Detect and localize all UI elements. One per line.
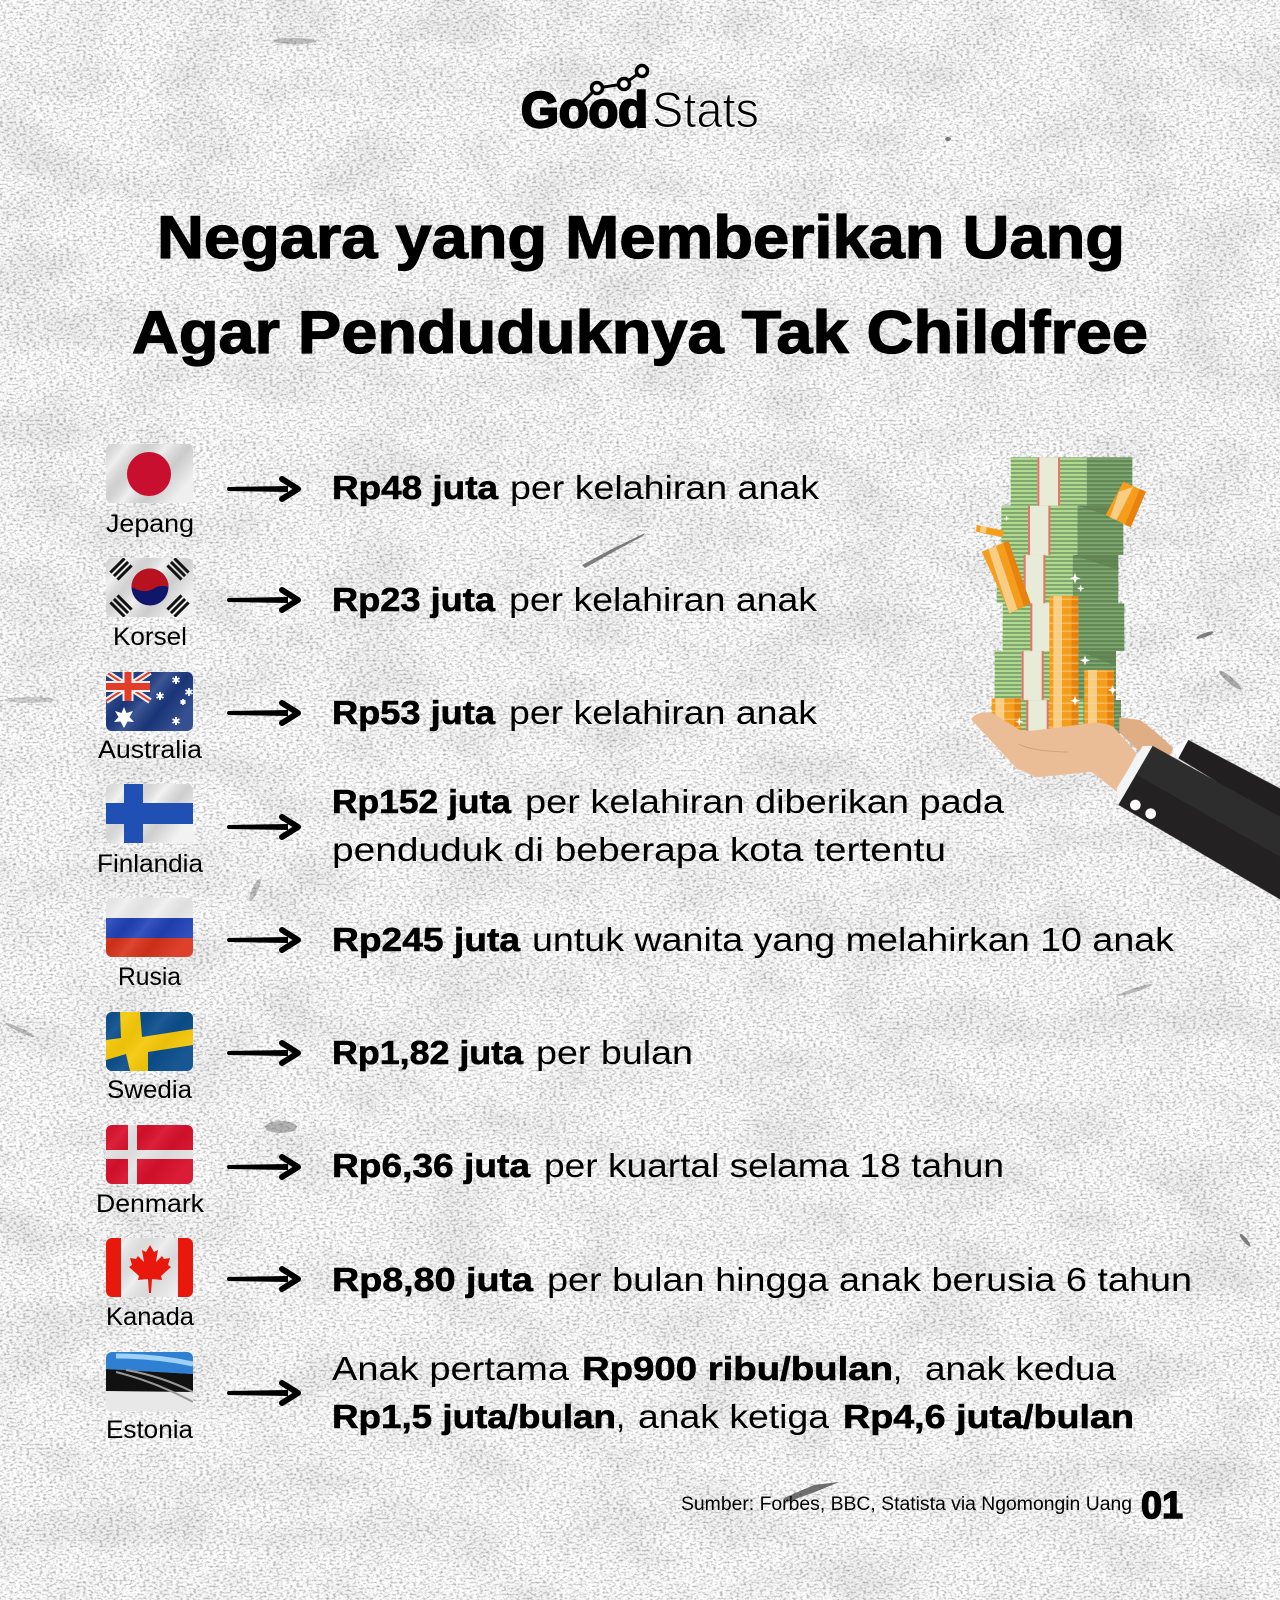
flag: Denmark: [106, 1125, 193, 1184]
row: Estonia: [106, 1350, 1134, 1444]
text: Jepang: [332, 469, 820, 506]
arrow: [227, 590, 298, 610]
page number: 01: [1141, 1485, 1183, 1527]
text: Jepang: per kelahiran anak: [510, 469, 820, 506]
row: Denmark: [96, 1125, 1004, 1218]
arrow: [227, 479, 298, 499]
icon: rising chart line: [581, 66, 648, 104]
text: Australia: Rp53 juta: [332, 694, 496, 731]
arrow: [227, 1043, 298, 1063]
text: Kanada: per bulan hingga anak berusia 6 tahun: [547, 1261, 1192, 1298]
source note: Sumber: Forbes, BBC, Statista via Ngomongin Uang: [681, 1494, 1132, 1515]
text: Estonia: Rp1,5 juta/bulan: [332, 1398, 616, 1435]
flag: Estonia: [106, 1352, 193, 1411]
text: Rusia: untuk wanita yang melahirkan 10 anak: [532, 921, 1175, 958]
text: Swedia: per bulan: [536, 1034, 693, 1071]
label: Rusia: Rusia: [118, 963, 181, 991]
arrow: [227, 1383, 298, 1403]
flag: Finlandia: [106, 784, 193, 843]
text: Korsel: Rp23 juta: [332, 581, 496, 618]
text: Finlandia: Rp152 juta: [332, 783, 512, 820]
label: Jepang: Jepang: [106, 510, 194, 538]
text: Finlandia: per kelahiran diberikan pada: [525, 783, 1005, 820]
text: Estonia: ,: [616, 1398, 625, 1435]
text: Estonia: ,: [893, 1350, 902, 1387]
text: Kanada: [332, 1261, 1192, 1298]
flag: Kanada: [106, 1238, 193, 1297]
label: Estonia: Estonia: [106, 1416, 193, 1444]
coin stacks: [976, 482, 1146, 735]
text: Korsel: [332, 581, 818, 618]
text: Denmark: per kuartal selama 18 tahun: [544, 1147, 1004, 1184]
sparkles: [1004, 515, 1118, 726]
row: Rusia: [106, 898, 1175, 991]
label: Swedia: Swedia: [107, 1076, 192, 1104]
text: Rusia: [332, 921, 1175, 958]
text: Kanada: Rp8,80 juta: [332, 1261, 534, 1298]
text: Estonia: Rp4,6 juta/bulan: [843, 1398, 1134, 1435]
label: Korsel: Korsel: [113, 623, 187, 651]
row: Kanada: [106, 1238, 1192, 1331]
text: Finlandia: [332, 783, 1005, 868]
logo: GoodStats: Stats: [652, 82, 759, 138]
text: Australia: per kelahiran anak: [509, 694, 818, 731]
label: Australia: Australia: [98, 736, 202, 764]
text: Estonia: anak kedua: [925, 1350, 1117, 1387]
flag: Australia: [106, 672, 193, 731]
text: Swedia: [332, 1034, 693, 1071]
label: Denmark: Denmark: [96, 1190, 205, 1218]
text: Estonia: [332, 1350, 1134, 1435]
arrow: [227, 930, 298, 950]
label: Kanada: Kanada: [106, 1303, 194, 1331]
hand: [971, 712, 1173, 792]
sleeve and cuff: [1117, 740, 1280, 899]
text: Swedia: Rp1,82 juta: [332, 1034, 524, 1071]
illustration: hand holding money and coins: [971, 457, 1280, 899]
text: Denmark: [332, 1147, 1004, 1184]
title: Agar Penduduknya Tak Childfree: [132, 299, 1148, 366]
flag: Swedia: [106, 1012, 193, 1071]
text: Korsel: per kelahiran anak: [509, 581, 818, 618]
text: Estonia: Anak pertama: [332, 1350, 570, 1387]
logo: GoodStats: [521, 66, 759, 138]
text: Estonia: Rp900 ribu/bulan: [582, 1350, 893, 1387]
label: Finlandia: Finlandia: [97, 850, 203, 878]
row: Swedia: [106, 1012, 693, 1104]
row: Korsel: [106, 558, 818, 651]
logo: GoodStats: Good: [521, 82, 648, 138]
flag: Jepang: [106, 444, 193, 503]
flag: Rusia: [106, 898, 193, 957]
row: Finlandia: [97, 783, 1005, 878]
arrow: [227, 817, 298, 837]
arrow: [227, 1269, 298, 1289]
row: Jepang: [106, 444, 820, 538]
bill stacks: [995, 457, 1132, 733]
flag: Korsel: [106, 558, 193, 617]
text: Denmark: Rp6,36 juta: [332, 1147, 531, 1184]
arrow: [227, 1157, 298, 1177]
text: Finlandia: penduduk di beberapa kota tertentu: [332, 831, 946, 868]
row: Australia: [98, 672, 818, 764]
text: Rusia: Rp245 juta: [332, 921, 521, 958]
arrow: [227, 703, 298, 723]
text: Estonia: anak ketiga: [638, 1398, 830, 1435]
title: Negara yang Memberikan Uang: [157, 204, 1125, 271]
text: Jepang: Rp48 juta: [332, 469, 499, 506]
title: [132, 204, 1148, 366]
text: Australia: [332, 694, 818, 731]
